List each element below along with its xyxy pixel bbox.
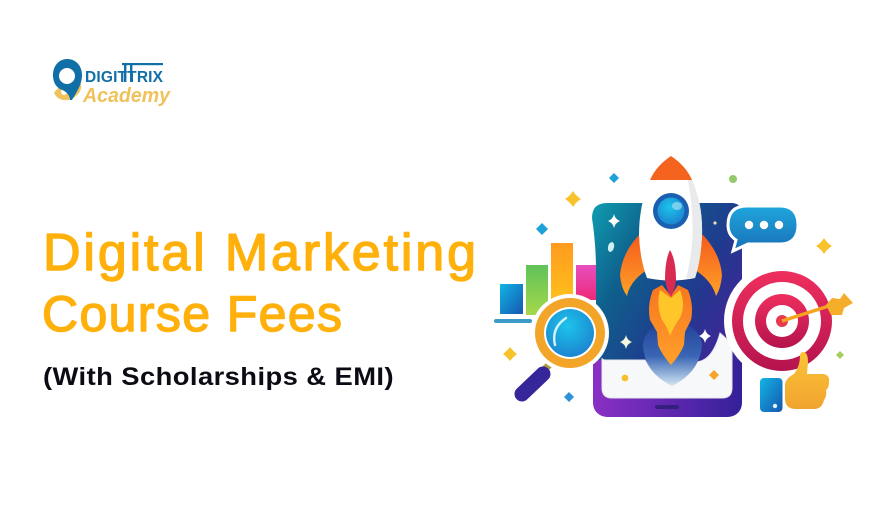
right fin [692,233,722,296]
tablet screen [592,203,742,360]
magnifier rim [531,294,609,372]
rocket body [639,180,702,280]
rocket [620,156,722,297]
phone icon [760,378,782,412]
blue exhaust cloud [643,320,702,386]
title line 1: Digital Marketing [43,224,476,282]
rocket window [653,193,689,229]
logo wordmark: Digittrix: DIGITTRIX [85,69,164,86]
left fin [620,233,650,296]
title [42,224,476,342]
arrow in target [782,293,853,321]
magnifier lens [546,309,594,357]
tablet purple frame [593,300,742,417]
rocket nose [650,156,692,180]
subtitle: (With Scholarships & EMI) [43,363,394,391]
logo icon: gold key pin [54,84,81,100]
bar chart [494,243,600,323]
title line 2: Course Fees [42,286,342,342]
centre fin [665,250,676,297]
magnifier handle [541,363,551,373]
magnifying glass [522,294,609,394]
bubble dots [745,221,753,229]
logo wordmark: Academy: Academy [82,85,171,107]
illustration: digital marketing rocket [494,156,853,417]
logo: Digittrix Academy [53,59,171,107]
tablet home bar [655,405,679,409]
sparkles and dots [503,173,844,402]
logo icon: blue location pin [53,59,82,100]
chat bubble [728,206,798,251]
tablet white panel [602,333,732,398]
flame [649,285,692,365]
thumbs up [785,352,829,409]
tablet [592,203,742,417]
target [724,263,853,379]
